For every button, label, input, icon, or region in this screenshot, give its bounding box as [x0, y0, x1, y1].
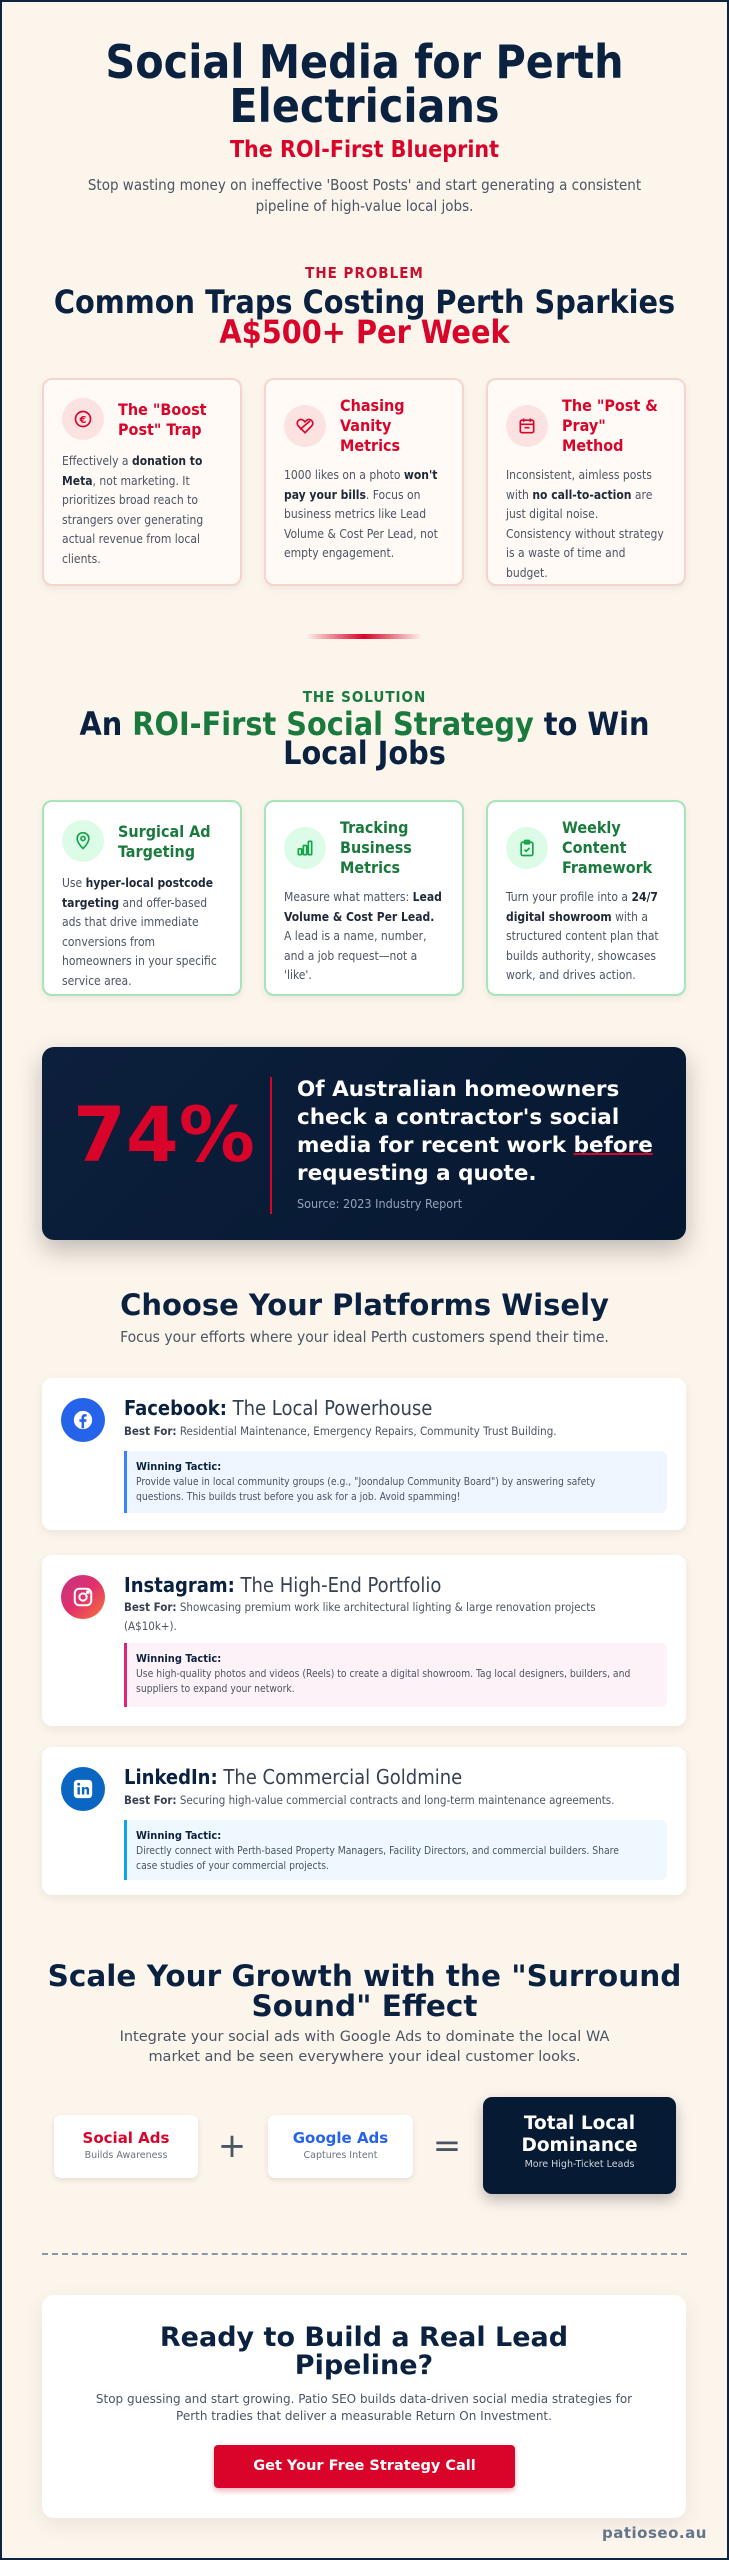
- card: tracking metrics: Tracking Business Metrics: [340, 818, 412, 877]
- heading: problem: Common Traps Costing Perth Sparkies: [54, 283, 675, 321]
- panel: facebook: [42, 1378, 686, 1530]
- box: social ads: Social Ads: [83, 2129, 169, 2147]
- panel: instagram: Best For: Showcasing premium work like architectural lighting & large renovation projects: [124, 1600, 596, 1614]
- heading: solution: [80, 705, 649, 772]
- card: boost post trap: [42, 378, 242, 586]
- card: post & pray: Pray": [562, 416, 606, 435]
- card: boost post trap: The "Boost Post" Trap: [118, 400, 207, 439]
- panel: solution cards: [42, 800, 686, 998]
- heading: problem: A$500+ Per Week: [219, 313, 510, 351]
- panel: linkedin: LinkedIn: The Commercial Goldmine: [124, 1765, 462, 1789]
- panel: linkedin: [42, 1747, 686, 1895]
- stat text: check a contractor's social: [297, 1105, 619, 1130]
- box: total local dominance: [483, 2097, 676, 2194]
- card: post & pray: Inconsistent, aimless posts with no call-to-action are just digital noise.: [506, 468, 652, 521]
- box: total local dominance: Total Local: [524, 2113, 635, 2134]
- panel: facebook: Best For: Residential Maintenance, Emergency Repairs, Community Trust Building.: [124, 1424, 557, 1438]
- stat number: 74%: [73, 1090, 255, 1179]
- card: weekly content: Weekly Content Framework: [562, 818, 652, 877]
- title: Social Media for Perth: [105, 35, 624, 89]
- tactic: linkedin: Directly connect with Perth-based Property Managers, Facility Directors, and commercial builders. Share: [136, 1845, 619, 1857]
- box: google ads: [268, 2115, 413, 2178]
- intro text: Stop wasting money on ineffective 'Boost Posts' and start generating a consistent pipeline of high-value local jobs.: [88, 176, 641, 215]
- tactic: linkedin: [124, 1820, 667, 1880]
- icon: bar chart: [284, 827, 326, 869]
- subheading: surround sound: Integrate your social ads with Google Ads to dominate the local WA market and be seen everywhere your ideal customer looks.: [120, 2029, 609, 2065]
- card: post & pray: The "Post &: [562, 396, 658, 415]
- card: vanity metrics: [264, 378, 464, 586]
- section label: the problem: THE PROBLEM: [305, 264, 424, 282]
- card: tracking metrics: Measure what matters: Lead: [284, 890, 442, 904]
- heading: platforms: Choose Your Platforms Wisely: [120, 1288, 609, 1322]
- card: tracking metrics: and a job request—not a: [284, 948, 417, 962]
- divider dashed: [42, 2253, 687, 2255]
- cta heading: Pipeline?: [295, 2350, 433, 2381]
- icon: linkedin: [61, 1767, 105, 1811]
- tactic: linkedin: Winning Tactic:: [136, 1829, 221, 1842]
- card: tracking metrics: A lead is a name, number,: [284, 929, 426, 943]
- panel: problem cards: [42, 378, 686, 588]
- card: post & pray: [486, 378, 686, 586]
- cta text: Stop guessing and start growing. Patio SEO builds data-driven social media strategies for Perth tradies that deliver a measurable Return On Investment.: [96, 2392, 632, 2423]
- card: surgical targeting: Surgical Ad Targeting: [118, 822, 211, 861]
- icon: plus: +: [218, 2126, 246, 2166]
- subheading: platforms: Focus your efforts where your ideal Perth customers spend their time.: [120, 1328, 609, 1346]
- panel: instagram: Instagram: The High-End Portfolio: [124, 1573, 441, 1597]
- source: Source: 2023 Industry Report: [297, 1196, 462, 1211]
- tactic: facebook: questions. This builds trust before you ask for a job. Avoid spamming!: [136, 1491, 460, 1503]
- stat text: requesting a quote.: [297, 1161, 537, 1186]
- icon: calendar: [506, 405, 548, 447]
- cta heading: Ready to Build a Real Lead: [160, 2322, 568, 2353]
- icon: instagram: [61, 1575, 105, 1619]
- divider: red gradient: [306, 634, 422, 639]
- icon: equals: =: [433, 2126, 461, 2166]
- icon: broken heart: [284, 405, 326, 447]
- box: google ads: Captures Intent: [304, 2150, 377, 2161]
- card: surgical targeting: Use hyper-local postcode targeting and offer-based ads that drive immediate conversions from homeowners in your specific service area.: [62, 876, 217, 988]
- panel: instagram: [42, 1555, 686, 1726]
- panel: facebook: Facebook: The Local Powerhouse: [124, 1396, 432, 1420]
- equation: social + google = dominance: [53, 2096, 684, 2208]
- card: tracking metrics: 'like'.: [284, 968, 312, 982]
- subtitle: The ROI-First Blueprint: [230, 137, 499, 163]
- title: [105, 35, 624, 133]
- tactic: facebook: Provide value in local community groups (e.g., "Joondalup Community Board") by answering safety: [136, 1476, 595, 1488]
- stat text: Of Australian homeowners: [297, 1077, 619, 1102]
- footer brand: patioseo.au: [602, 2524, 707, 2542]
- icon: map pin: [62, 820, 104, 862]
- title: Electricians: [229, 79, 500, 133]
- card: vanity metrics: Chasing Vanity Metrics: [340, 396, 405, 455]
- box: social ads: Builds Awareness: [85, 2150, 167, 2161]
- tactic: linkedin: case studies of your commercial projects.: [136, 1860, 329, 1872]
- panel: call to action: [42, 2295, 686, 2518]
- heading: surround sound: Sound" Effect: [252, 1989, 477, 2023]
- stat panel: 74%: [42, 1047, 686, 1240]
- box: total local dominance: More High-Ticket Leads: [525, 2159, 634, 2170]
- heading: solution: An ROI-First Social Strategy to Win: [80, 705, 649, 743]
- icon: clipboard check: [506, 827, 548, 869]
- button: [214, 2445, 515, 2488]
- section label: the solution: THE SOLUTION: [303, 688, 426, 706]
- box: google ads: Google Ads: [293, 2129, 388, 2147]
- card: tracking metrics: Volume & Cost Per Lead.: [284, 910, 434, 924]
- cta heading: [160, 2322, 568, 2381]
- heading: solution: Local Jobs: [283, 734, 446, 772]
- card: boost post trap: Effectively a donation to Meta, not marketing. It prioritizes broad reach to strangers over generating actual revenue from local clients.: [62, 454, 203, 566]
- icon: coin: €: [79, 415, 87, 426]
- card: post & pray: Consistency without strategy is a waste of time and: [506, 526, 664, 560]
- heading: surround sound: [48, 1959, 681, 2023]
- stat text: [297, 1077, 653, 1186]
- card: surgical targeting: [42, 800, 242, 996]
- card: vanity metrics: 1000 likes on a photo won't pay your bills. Focus on business metrics like Lead Volume & Cost Per Lead, not empty engagement.: [284, 468, 438, 560]
- panel: linkedin: Best For: Securing high-value commercial contracts and long-term maintenance agreements.: [124, 1793, 614, 1807]
- tactic: instagram: [124, 1643, 667, 1707]
- heading: problem: [54, 283, 675, 351]
- card: tracking metrics: [264, 800, 464, 996]
- heading: surround sound: Scale Your Growth with the "Surround: [48, 1959, 681, 1993]
- box: social ads: [54, 2115, 198, 2178]
- stat text: media for recent work before: [297, 1133, 653, 1158]
- card: weekly content: [486, 800, 686, 996]
- tactic: instagram: suppliers to expand your network.: [136, 1683, 295, 1695]
- tactic: instagram: Winning Tactic:: [136, 1652, 221, 1665]
- tactic: facebook: [124, 1451, 667, 1513]
- box: total local dominance: Dominance: [521, 2135, 638, 2156]
- card: post & pray: budget.: [506, 566, 548, 580]
- icon: facebook: [61, 1398, 105, 1442]
- button: Get Your Free Strategy Call: [253, 2458, 476, 2474]
- tactic: facebook: Winning Tactic:: [136, 1460, 221, 1473]
- card: weekly content: Turn your profile into a 24/7 digital showroom with a structured content plan that builds authority, showcases work, and drives action.: [506, 890, 659, 982]
- tactic: instagram: Use high-quality photos and videos (Reels) to create a digital showroom. Tag local designers, builders, and: [136, 1668, 630, 1680]
- icon: coin: [62, 398, 104, 440]
- card: post & pray: Method: [562, 436, 623, 455]
- panel: instagram: (A$10k+).: [124, 1619, 177, 1633]
